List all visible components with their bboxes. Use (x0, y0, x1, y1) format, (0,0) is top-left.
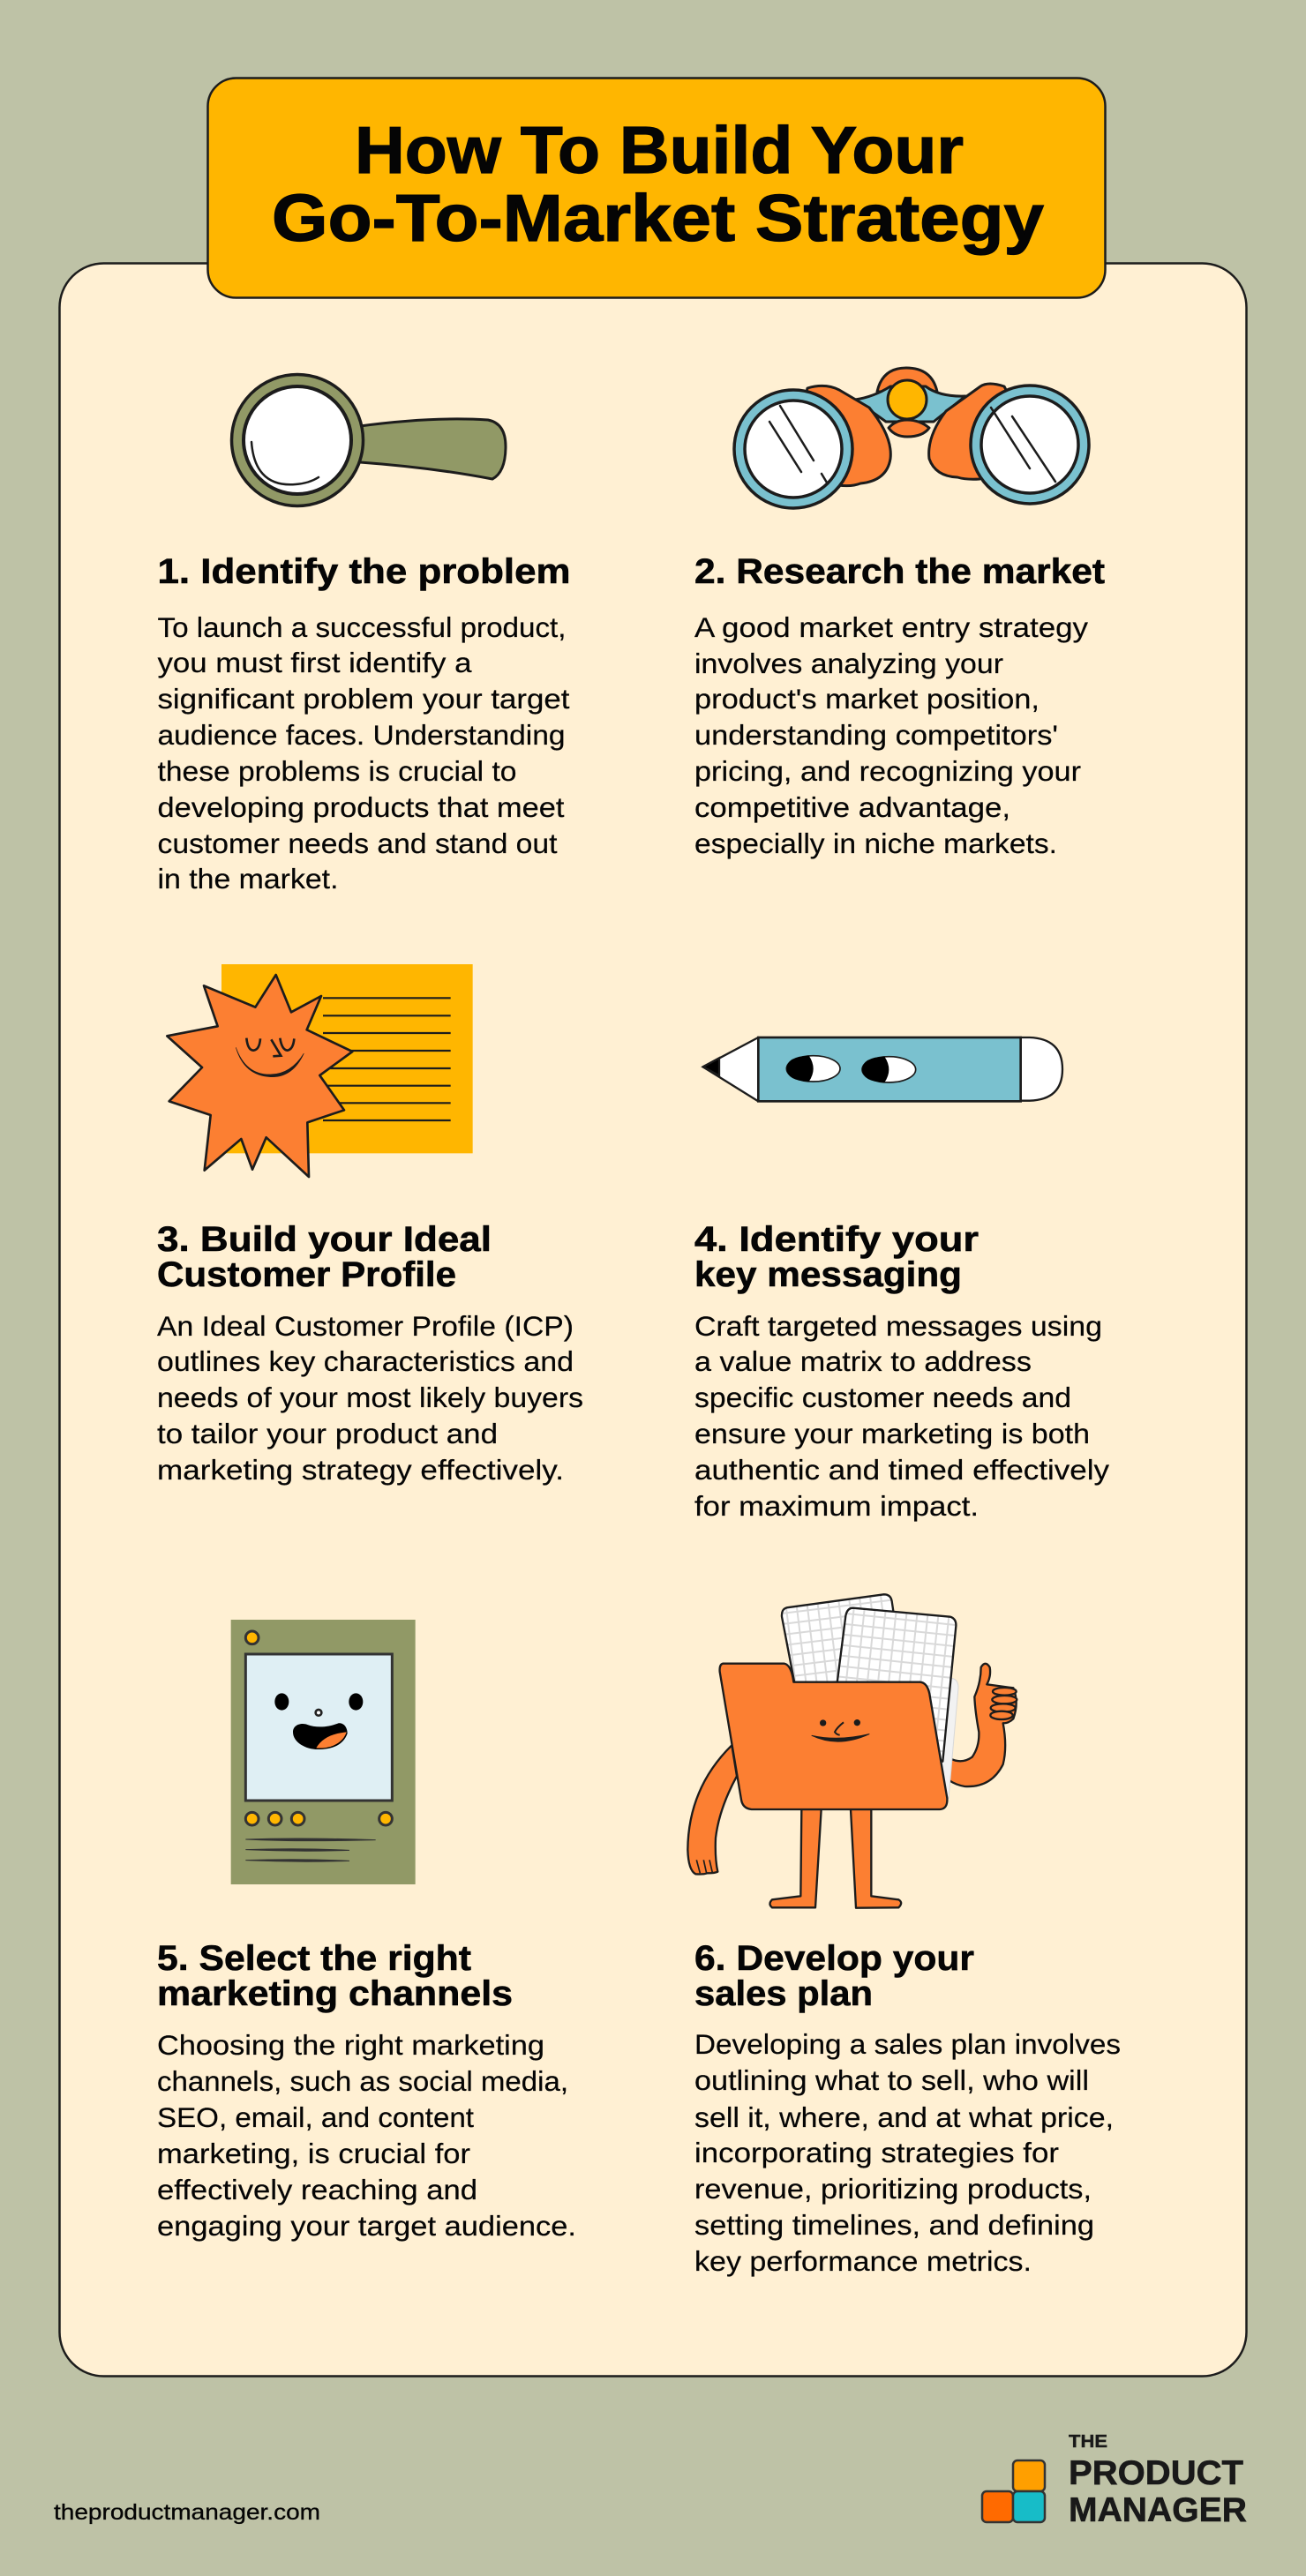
text block: step 3: to tailor your product and (157, 1418, 498, 1449)
text block: step 5: engaging your target audience. (157, 2210, 576, 2242)
text block: step 6: revenue, prioritizing products, (694, 2173, 1092, 2205)
text block: step 3: An Ideal Customer Profile (ICP) (157, 1310, 574, 1342)
heading: step 3: Customer Profile (157, 1255, 456, 1294)
text block: step 1: customer needs and stand out (157, 827, 558, 859)
heading: step 2: 2. Research the market (694, 552, 1105, 591)
icon: binoculars (734, 368, 1089, 508)
heading: step 3: 3. Build your Ideal (157, 1220, 492, 1259)
icon: smiling device (231, 1620, 416, 1884)
heading: step 6 (694, 1939, 974, 2013)
logo: The Product Manager: PRODUCT (1069, 2454, 1243, 2492)
heading: step 4: 4. Identify your (694, 1220, 979, 1259)
text block: step 4 (694, 1310, 1109, 1522)
heading: step 4 (694, 1220, 979, 1294)
icon: folder character with thumbs up (687, 1594, 1017, 1908)
text block: step 2: pricing, and recognizing your (694, 755, 1081, 787)
title banner: Go-To-Market Strategy (272, 181, 1044, 255)
text block: step 2: involves analyzing your (694, 648, 1003, 679)
text block: step 6: incorporating strategies for (694, 2137, 1059, 2168)
text block: step 4: Craft targeted messages using (694, 1310, 1102, 1342)
text block: step 2: A good market entry strategy (694, 611, 1088, 643)
text block: step 6 (694, 2028, 1121, 2277)
text block: step 3: outlines key characteristics and (157, 1345, 574, 1377)
text block: step 6: Developing a sales plan involves (694, 2028, 1121, 2060)
text block: step 5 (157, 2029, 576, 2242)
text block: step 2: understanding competitors' (694, 719, 1058, 751)
text block: step 5: effectively reaching and (157, 2174, 477, 2205)
text block: step 1: in the market. (157, 863, 339, 895)
text block: step 2: competitive advantage, (694, 791, 1010, 823)
text block: step 5: Choosing the right marketing (157, 2029, 544, 2061)
text block: step 3 (157, 1310, 583, 1486)
text block: step 5: channels, such as social media, (157, 2065, 568, 2097)
panel: main content card (60, 263, 1246, 2377)
icon: magnifying glass (231, 374, 506, 506)
heading: step 6: 6. Develop your (694, 1939, 974, 1978)
logo: The Product Manager: THE (1069, 2432, 1107, 2452)
text block: step 2: product's market position, (694, 683, 1040, 715)
text block: step 1: these problems is crucial to (157, 755, 517, 787)
text block: step 4: for maximum impact. (694, 1490, 979, 1522)
text block: step 4: a value matrix to address (694, 1345, 1032, 1377)
text block: step 4: authentic and timed effectively (694, 1454, 1109, 1486)
text block: step 6: sell it, where, and at what price, (694, 2101, 1114, 2133)
heading: step 5: marketing channels (157, 1974, 513, 2013)
text block: step 3: needs of your most likely buyers (157, 1382, 583, 1413)
text block: step 1: developing products that meet (157, 791, 565, 823)
icon: pencil with eyes (703, 1037, 1062, 1101)
text block: step 1: audience faces. Understanding (157, 719, 565, 751)
text block: step 1: To launch a successful product, (157, 611, 567, 643)
text block: step 1: significant problem your target (157, 683, 570, 715)
text block: step 6: setting timelines, and defining (694, 2209, 1094, 2241)
heading: step 5 (157, 1939, 513, 2013)
heading: step 3 (157, 1220, 492, 1294)
text block: step 4: ensure your marketing is both (694, 1418, 1090, 1449)
footer url: theproductmanager.com (54, 2500, 320, 2525)
heading: step 5: 5. Select the right (157, 1939, 471, 1978)
title banner (208, 78, 1105, 298)
text block: step 1 (157, 611, 570, 895)
text block: step 4: specific customer needs and (694, 1382, 1071, 1413)
text block: step 2 (694, 611, 1088, 859)
title banner: How To Build Your (355, 113, 964, 187)
logo: The Product Manager: MANAGER (1069, 2491, 1247, 2529)
text block: step 5: marketing, is crucial for (157, 2138, 470, 2169)
icon: smiling sun over document (167, 964, 473, 1177)
text block: step 1: you must first identify a (157, 647, 472, 678)
text block: step 6: outlining what to sell, who will (694, 2064, 1089, 2096)
text block: step 6: key performance metrics. (694, 2245, 1032, 2277)
text block: step 3: marketing strategy effectively. (157, 1454, 564, 1486)
text block: step 2: especially in niche markets. (694, 827, 1057, 859)
heading: step 1: 1. Identify the problem (157, 552, 570, 591)
text block: step 5: SEO, email, and content (157, 2101, 474, 2133)
logo: The Product Manager (982, 2432, 1247, 2529)
heading: step 6: sales plan (694, 1974, 873, 2013)
heading: step 4: key messaging (694, 1255, 962, 1294)
